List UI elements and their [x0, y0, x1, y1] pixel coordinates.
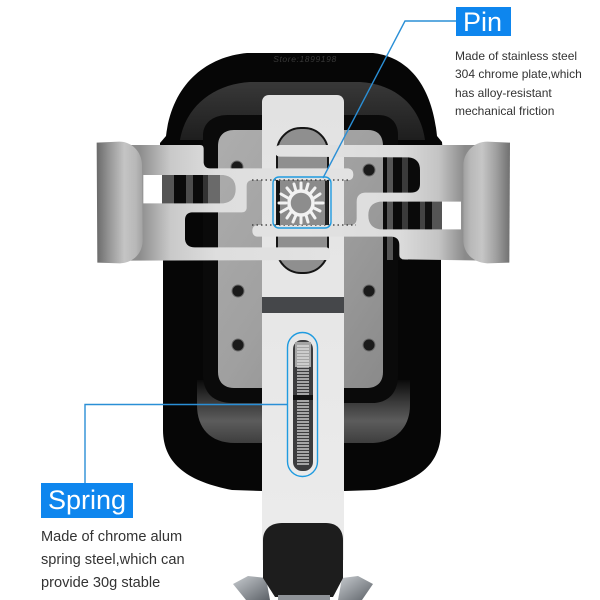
gear spokes	[279, 183, 323, 223]
gear hub	[289, 191, 313, 215]
spring description: provide 30g stable	[41, 575, 160, 591]
dark stripes right	[383, 157, 442, 260]
lower grey pan	[197, 380, 410, 443]
black hook	[263, 523, 343, 597]
bottom wings	[233, 576, 373, 600]
centre plate	[262, 95, 344, 560]
pin description: mechanical friction	[455, 104, 554, 118]
ratchet teeth	[252, 180, 356, 225]
upper shell shading	[180, 82, 425, 140]
spring highlight capsule	[288, 332, 318, 476]
pin description: has alloy-resistant	[455, 86, 552, 100]
dark band on plate	[262, 297, 344, 313]
spring slot	[293, 340, 313, 471]
spring description: spring steel,which can	[41, 552, 185, 568]
left clamp arm	[120, 145, 353, 261]
left grip handle	[97, 142, 143, 263]
spring description: Made of chrome alum	[41, 529, 182, 545]
phone holder illustration	[97, 53, 510, 600]
spring label: Spring	[48, 485, 126, 515]
pin highlight box	[273, 177, 331, 228]
mounting screws	[231, 161, 375, 351]
spring coils	[297, 346, 309, 464]
chrome base	[278, 595, 330, 600]
right clamp arm	[252, 145, 487, 261]
gear pin	[277, 181, 328, 225]
dark stripes left	[162, 175, 220, 205]
pin callout leader	[323, 21, 456, 178]
pin label: Pin	[463, 7, 502, 37]
pin description: 304 chrome plate,which	[455, 67, 582, 81]
silver back panel	[218, 130, 383, 388]
pin description: Made of stainless steel	[455, 49, 577, 63]
right grip handle	[463, 142, 510, 263]
black inner ring	[203, 115, 398, 403]
plate oval slot	[277, 128, 328, 273]
store watermark: Store:1899198	[273, 54, 337, 64]
black shell	[160, 53, 443, 491]
spring callout leader	[85, 404, 287, 483]
